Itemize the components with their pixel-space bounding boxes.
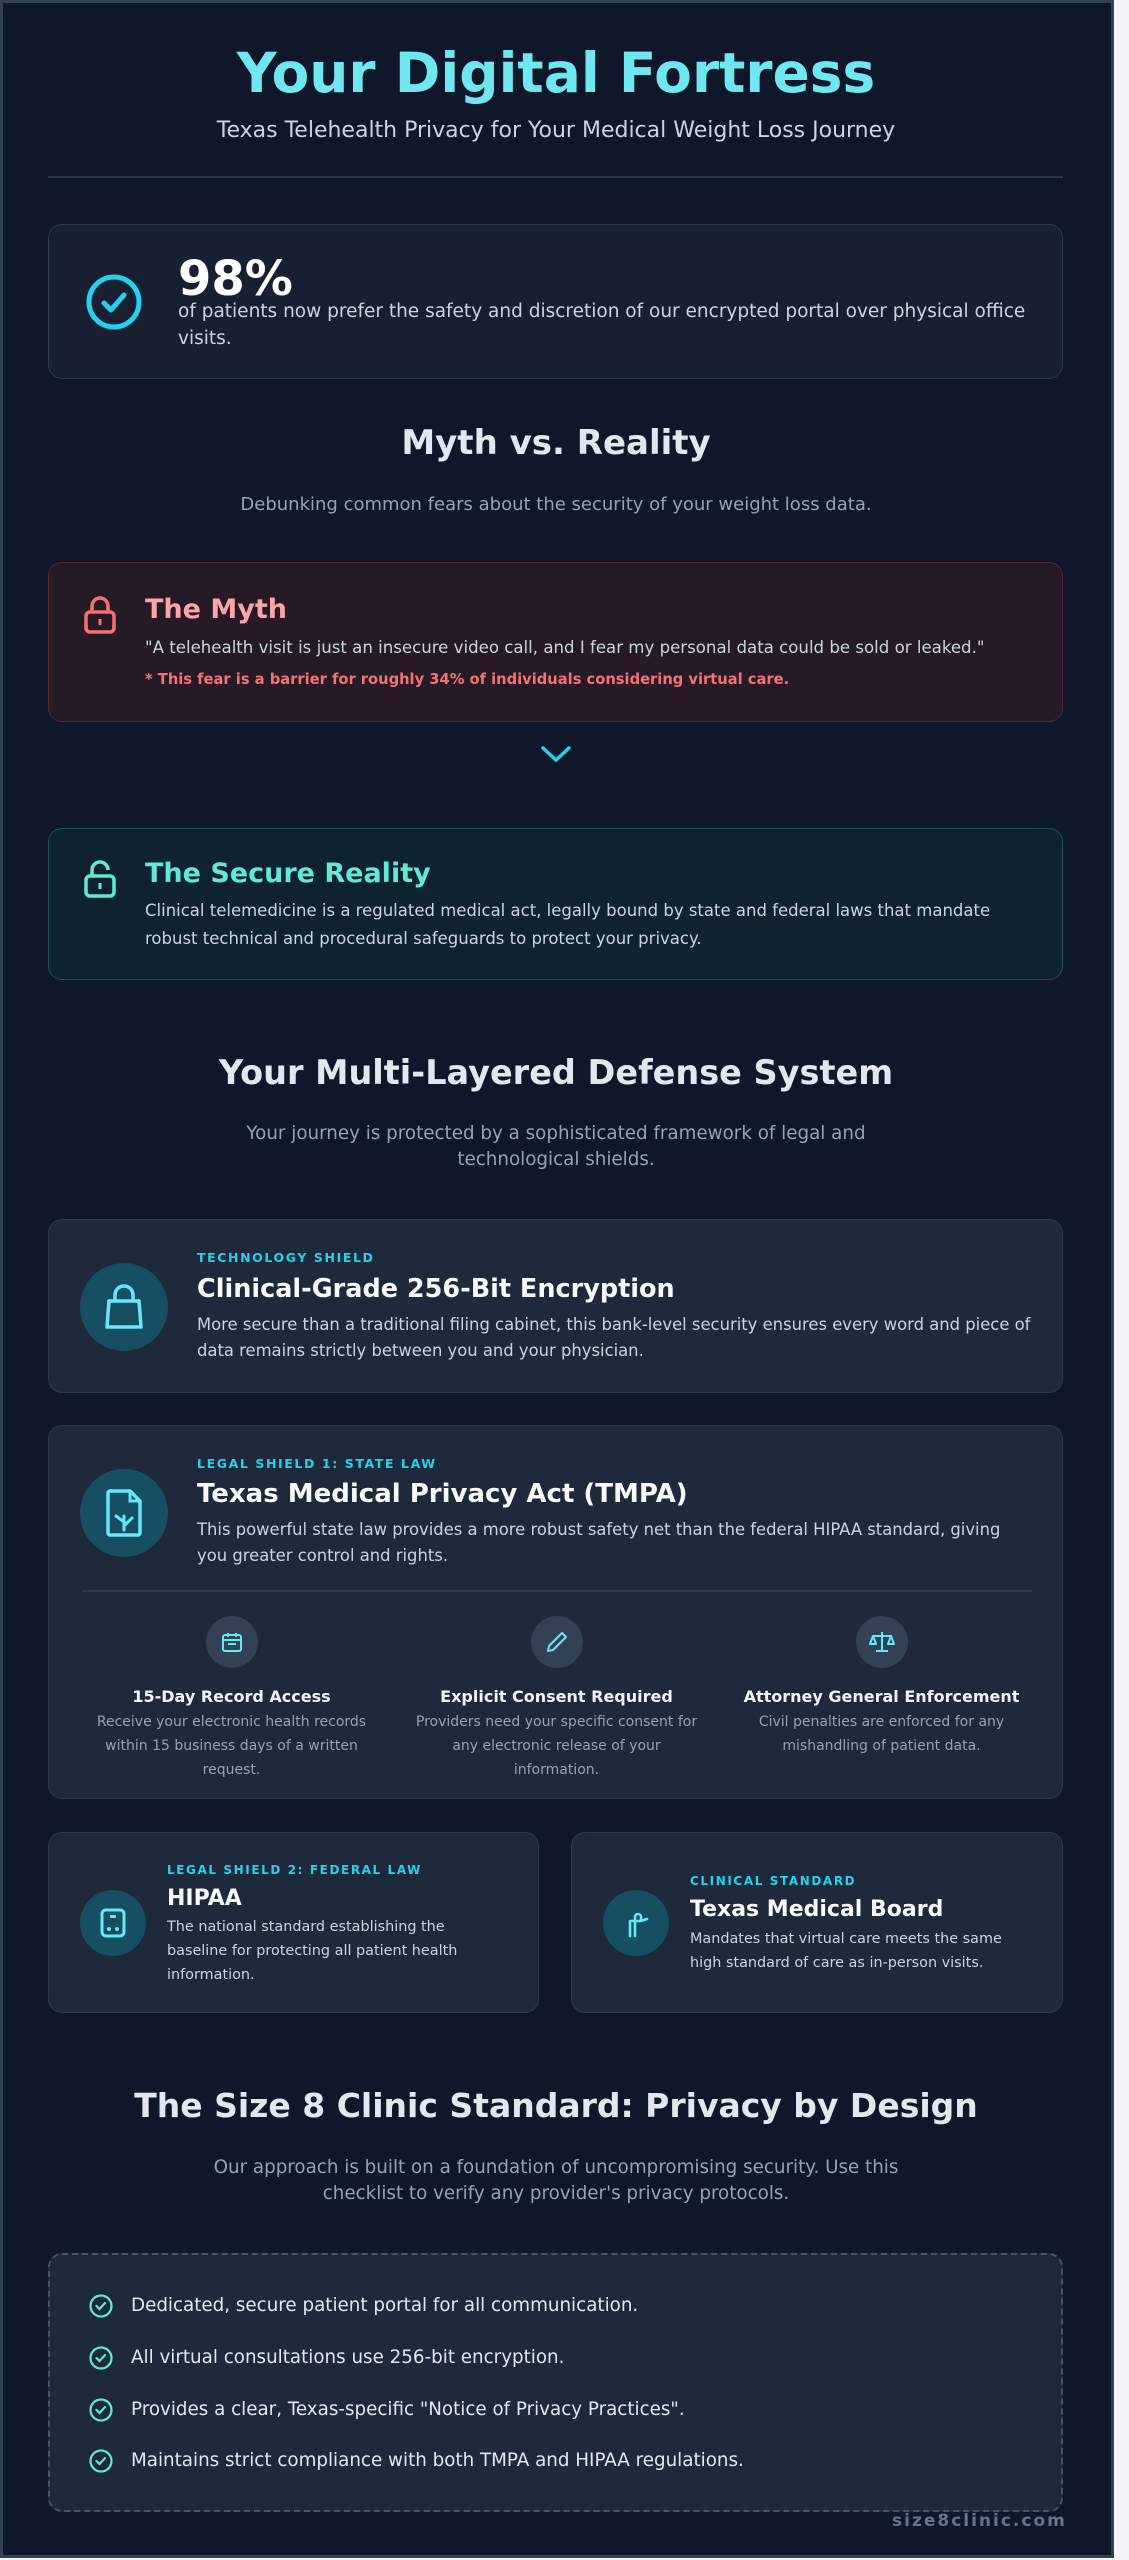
panel: Texas Medical Board	[571, 1832, 1063, 2013]
icon: check circle	[86, 274, 142, 330]
icon: scales	[856, 1616, 908, 1668]
subheading: Your journey is protected by a sophisticated framework of legal and technological shields.	[246, 1123, 866, 1170]
label: TECHNOLOGY SHIELD	[197, 1250, 375, 1265]
icon: medical	[603, 1890, 669, 1956]
feature: AG enforcement: Civil penalties are enforced for any mishandling of patient data.	[759, 1714, 1004, 1754]
heading: Size 8 standard: The Size 8 Clinic Standard: Privacy by Design	[134, 2086, 978, 2125]
arrow: chevron down	[541, 746, 571, 762]
heading: Myth vs Reality: Myth vs. Reality	[401, 423, 711, 463]
panel: TMPA	[48, 1425, 1063, 1799]
myth heading: The Myth	[145, 594, 287, 625]
text: Mandates that virtual care meets the same high standard of care as in-person visits.	[690, 1931, 1002, 1971]
icon: calendar	[206, 1616, 258, 1668]
title: Your Digital Fortress	[237, 41, 875, 105]
stat number: 98%	[178, 251, 293, 307]
title: Texas Medical Board	[690, 1897, 943, 1922]
label: CLINICAL STANDARD	[690, 1874, 856, 1888]
feature: 15-day access	[97, 1616, 366, 1778]
reality heading: The Secure Reality	[145, 858, 431, 889]
item 3: Provides a clear, Texas-specific "Notice of Privacy Practices".	[131, 2399, 685, 2420]
icon: unlocked lock	[84, 860, 116, 898]
label: LEGAL SHIELD 1: STATE LAW	[197, 1456, 437, 1471]
text: The national standard establishing the baseline for protecting all patient health information.	[167, 1919, 457, 1983]
heading: defense system: Your Multi-Layered Defense System	[219, 1053, 893, 1092]
icon: device	[80, 1890, 146, 1956]
title: Clinical-Grade 256-Bit Encryption	[197, 1274, 675, 1304]
panel: HIPAA	[48, 1832, 539, 2013]
title: HIPAA	[167, 1886, 242, 1911]
feature: consent: Explicit Consent Required	[440, 1687, 673, 1706]
subtitle: Texas Telehealth Privacy for Your Medical Weight Loss Journey	[217, 118, 895, 143]
feature: AG enforcement	[744, 1616, 1020, 1754]
panel: encryption	[48, 1219, 1063, 1393]
text: This powerful state law provides a more robust safety net than the federal HIPAA standard, giving you greater control and rights.	[197, 1520, 1000, 1565]
text: More secure than a traditional filing cabinet, this bank-level security ensures every word and piece of data remains strictly between you and your physician.	[197, 1315, 1030, 1360]
icon: document	[80, 1469, 168, 1557]
panel: secure reality	[48, 828, 1063, 980]
icon: bag lock	[80, 1263, 168, 1351]
feature: 15-day access: 15-Day Record Access	[132, 1687, 331, 1706]
stat text: of patients now prefer the safety and discretion of our encrypted portal over physical office visits.	[178, 301, 1025, 349]
label: LEGAL SHIELD 2: FEDERAL LAW	[167, 1863, 422, 1877]
panel: checklist	[48, 2253, 1063, 2512]
footer: website: size8clinic.com	[892, 2511, 1067, 2531]
myth note: * This fear is a barrier for roughly 34% of individuals considering virtual care.	[145, 671, 789, 688]
feature: consent: Providers need your specific consent for any electronic release of your information.	[416, 1714, 697, 1778]
feature: consent	[416, 1616, 698, 1778]
item 2: All virtual consultations use 256-bit encryption.	[131, 2347, 564, 2368]
subheading: Debunking common fears about the security of your weight loss data.	[240, 494, 872, 515]
item 1: Dedicated, secure patient portal for all communication.	[131, 2295, 638, 2316]
icon: lock	[84, 596, 116, 634]
item 4: Maintains strict compliance with both TMPA and HIPAA regulations.	[131, 2450, 744, 2471]
feature: AG enforcement: Attorney General Enforcement	[744, 1687, 1019, 1706]
subheading: Our approach is built on a foundation of uncompromising security. Use this checklist to verify any provider's privacy protocols.	[214, 2157, 898, 2204]
title: Texas Medical Privacy Act (TMPA)	[197, 1479, 688, 1509]
panel: myth	[48, 562, 1063, 722]
icon: pencil	[530, 1616, 582, 1668]
stat card: 98%	[48, 224, 1063, 379]
myth quote: "A telehealth visit is just an insecure video call, and I fear my personal data could be sold or leaked."	[145, 638, 984, 657]
reality text: Clinical telemedicine is a regulated medical act, legally bound by state and federal laws that mandate robust technical and procedural safeguards to protect your privacy.	[145, 901, 990, 948]
feature: 15-day access: Receive your electronic health records within 15 business days of a written request.	[97, 1714, 366, 1778]
